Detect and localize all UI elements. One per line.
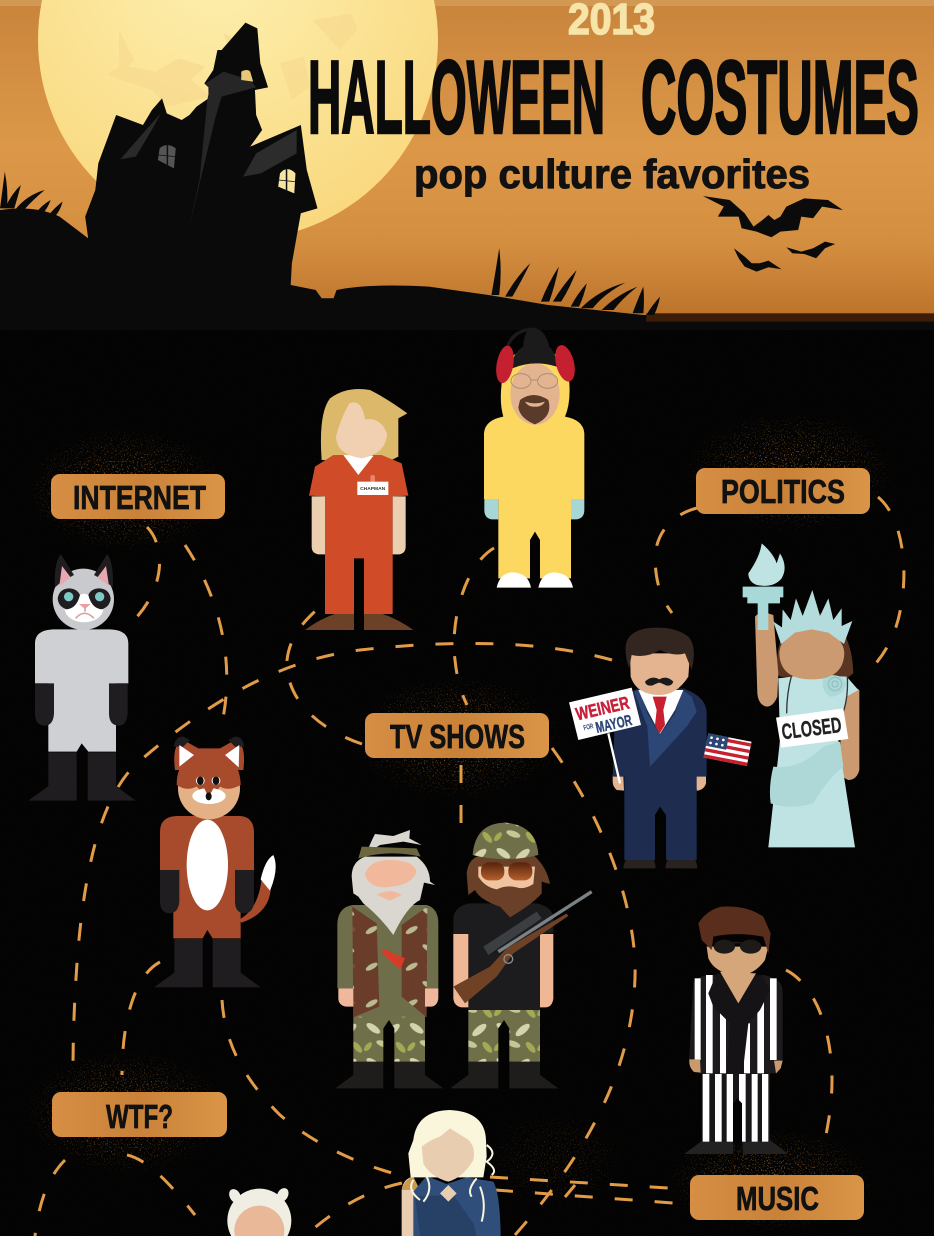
label: WTF? [52,1092,227,1137]
label: MUSIC [690,1175,864,1220]
dashed connector paths [35,497,904,1236]
name tag [357,482,388,495]
icon: American flag [704,733,752,766]
label: POLITICS [696,468,870,514]
closed sign [776,708,848,748]
character: Finn from Adventure Time, partly visible [227,1186,291,1236]
label: TV SHOWS: TV SHOWS [390,718,525,755]
character: Willie Robertson with rifle, Duck Dynasty [450,823,592,1088]
character: Anthony Weiner for Mayor [569,628,752,868]
campaign sign: MAYOR [594,712,634,737]
label: WTF?: WTF? [106,1098,173,1135]
character: Daenerys Targaryen, partly visible [402,1110,501,1236]
campaign sign: FOR [582,721,595,732]
label: INTERNET: INTERNET [73,479,206,516]
closed sign: CLOSED [780,712,843,744]
label: MUSIC: MUSIC [736,1180,819,1217]
label: TV SHOWS [365,713,549,758]
character: Walter White yellow hazmat suit [484,328,584,588]
character: Piper Chapman orange jumpsuit [305,389,413,630]
label: POLITICS: POLITICS [721,473,845,510]
character: Grumpy Cat [28,554,136,801]
character: Phil Robertson, Duck Dynasty [335,830,443,1088]
character: Scott Disick pinstripe suit [684,906,788,1154]
panel: header sky [0,0,934,325]
campaign sign: WEINER [574,693,631,724]
character: What Does the Fox Say fox [154,737,276,987]
label: INTERNET [51,474,225,519]
moon [38,0,438,240]
haunted house and ground silhouette [0,23,934,330]
icon: bats [703,196,843,272]
subtitle: pop culture favorites [414,151,810,197]
grass silhouettes [0,172,660,315]
character: Statue of Liberty closed [743,543,859,847]
speckled glows behind labels [0,326,934,1236]
campaign sign [569,688,641,740]
name tag: CHAPMAN [360,486,385,491]
